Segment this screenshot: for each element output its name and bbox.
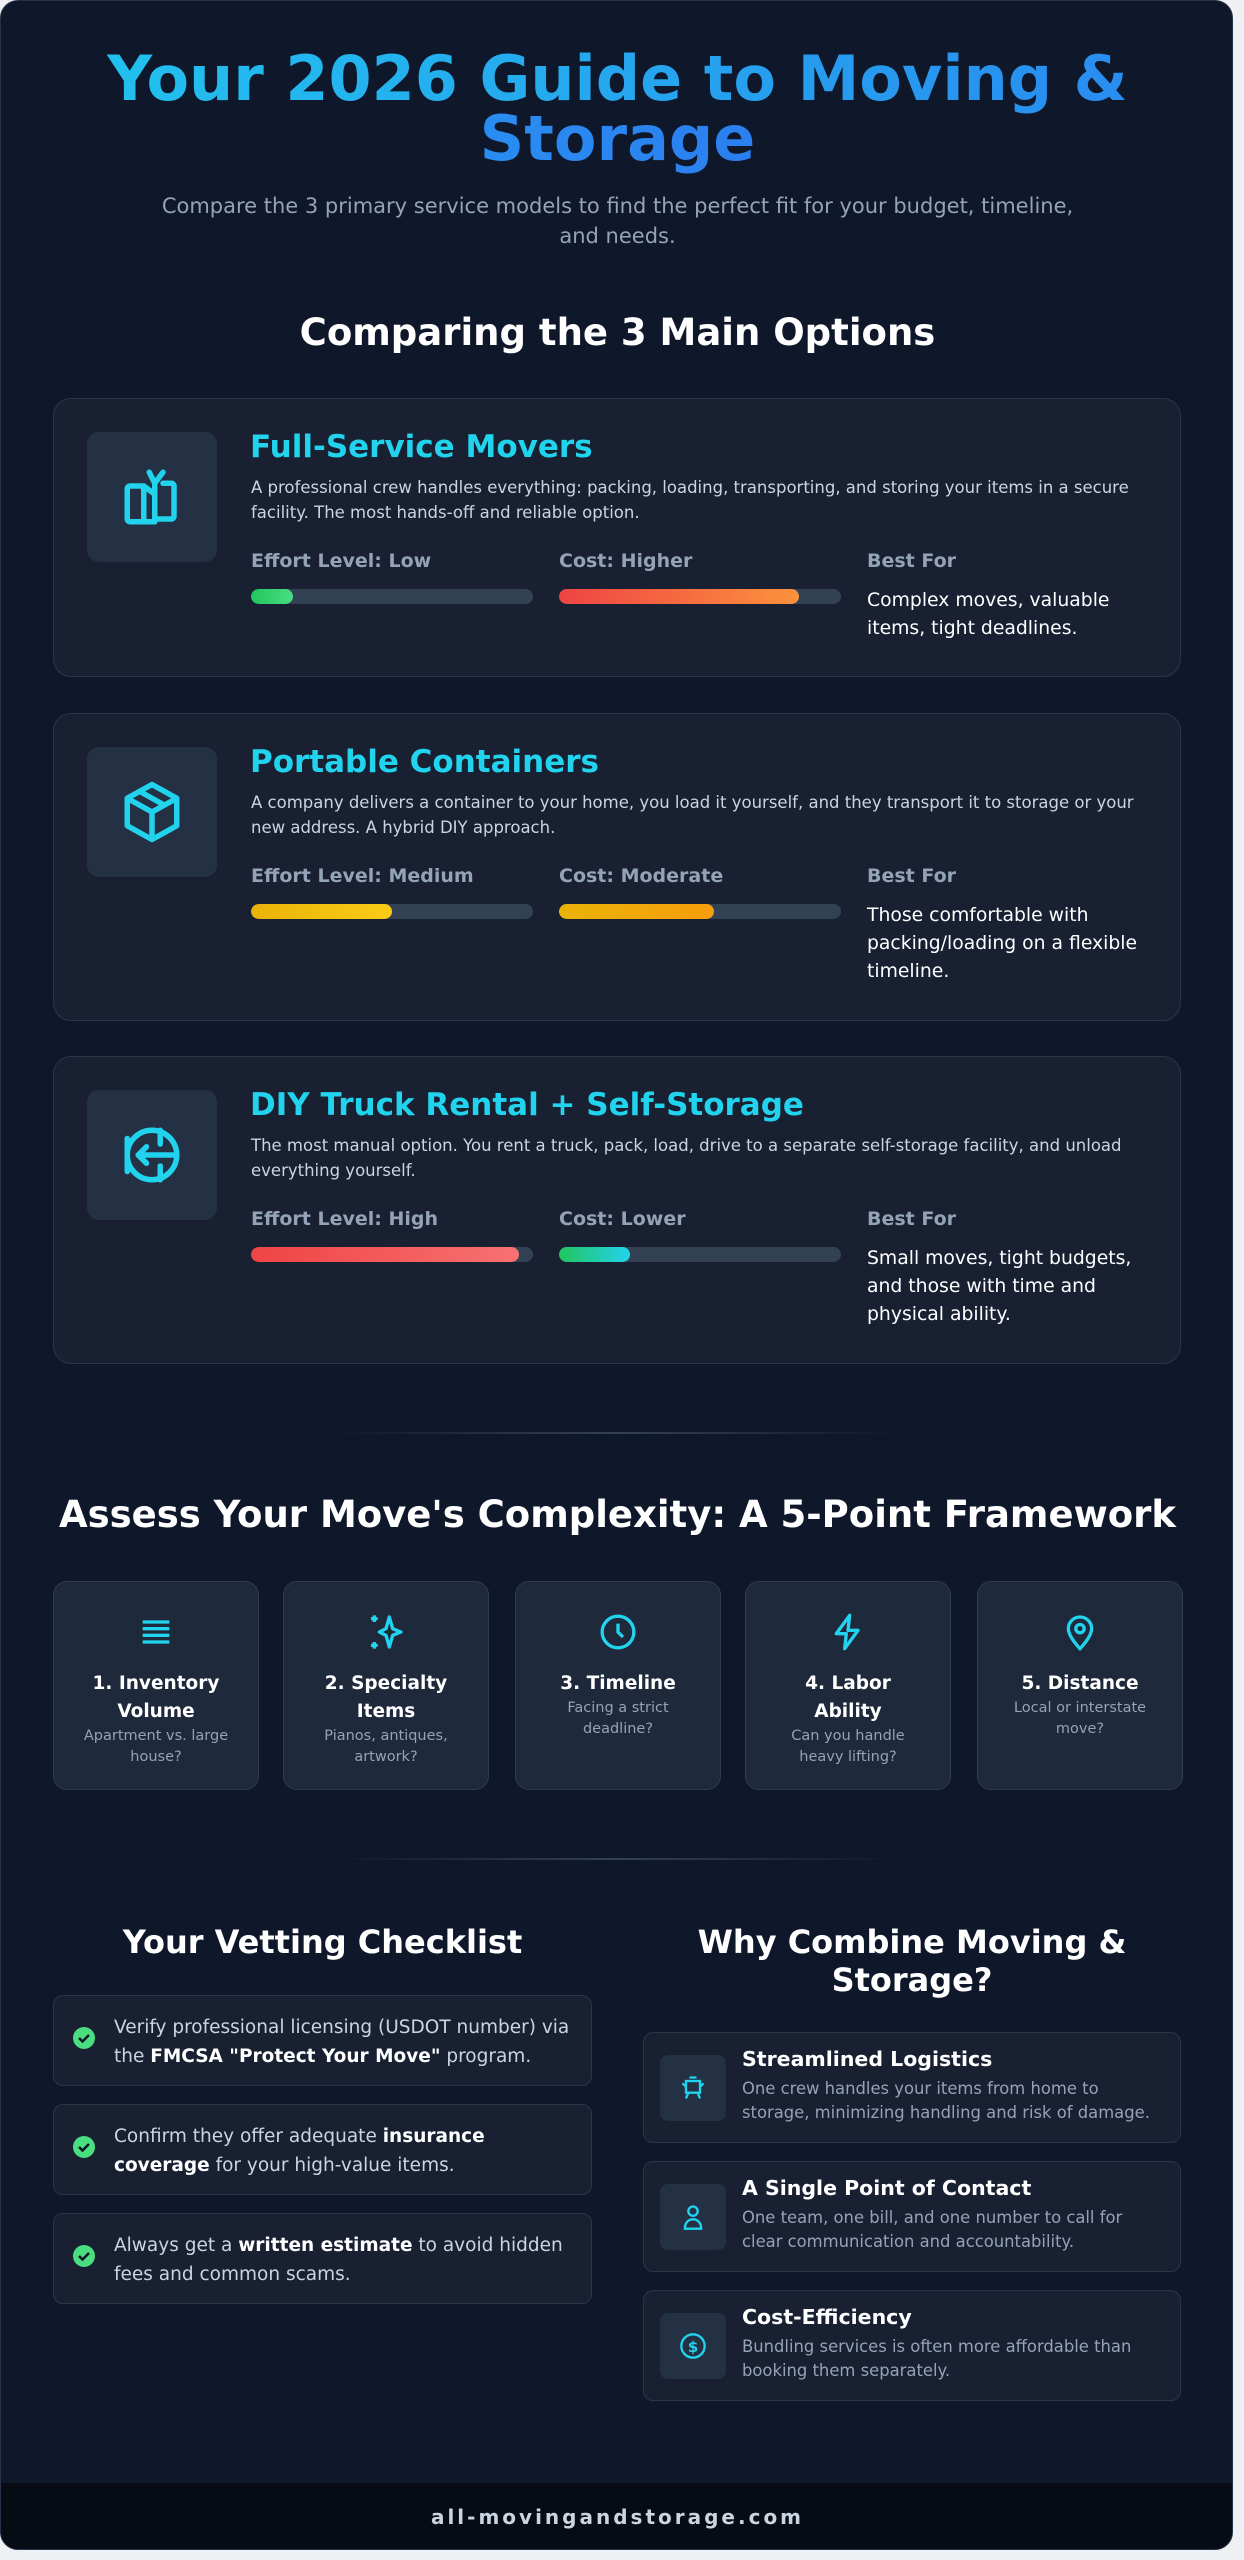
framework card 3: deadline? [583,1721,653,1737]
framework card 1: 1. Inventory [93,1673,219,1694]
footer: all-movingandstorage.com [431,2505,804,2529]
benefit 3: Cost-Efficiency [742,2305,912,2329]
panel: diy truck rental [53,1056,1181,1364]
effort meter: Effort Level: High [251,1208,438,1230]
description: A company delivers a container to your home, you load it yourself, and they transport it to storage or your new address. A hybrid DIY approach. [251,793,1134,837]
framework card 4: Ability [814,1701,882,1722]
checklist item 2: Confirm they offer adequate insurance coverage for your high-value items. [114,2126,485,2176]
heading: why combine: Storage? [832,1961,992,1999]
framework card 4 [745,1581,951,1790]
best for: Best For [867,1208,956,1230]
subtitle: Compare the 3 primary service models to find the perfect fit for your budget, timeline, and needs. [162,194,1073,248]
panel: full-service movers: Complex moves, valuable items, tight deadlines. [867,590,1109,639]
heading: framework: Assess Your Move's Complexity: A 5-Point Framework [59,1493,1176,1536]
title: Storage [480,102,755,175]
effort meter: Effort Level: Low [251,550,431,572]
framework card 4: Can you handle [791,1728,905,1744]
icon: box [87,747,217,877]
description: The most manual option. You rent a truck, pack, load, drive to a separate self-storage facility, and unload everything yourself. [251,1136,1122,1180]
benefit 1 [643,2032,1181,2143]
framework card 4: 4. Labor [805,1673,891,1694]
heading: DIY Truck Rental + Self-Storage [250,1087,804,1123]
benefit 1: Streamlined Logistics [742,2047,992,2071]
benefit 2 [643,2161,1181,2272]
icon: circle arrow [87,1090,217,1220]
effort meter: Effort Level: Medium [251,865,474,887]
framework card 3: Facing a strict [567,1700,669,1716]
framework card 2: Pianos, antiques, [324,1728,448,1744]
panel: portable containers: Those comfortable with packing/loading on a flexible timeline. [867,905,1137,982]
icon: boxes [87,432,217,562]
heading: comparing: Comparing the 3 Main Options [300,311,935,354]
description: A professional crew handles everything: packing, loading, transporting, and storing your items in a secure facility. The most hands-off and reliable option. [251,478,1129,522]
benefit 3: Bundling services is often more affordable than booking them separately. [742,2337,1131,2380]
framework card 5: Local or interstate [1014,1700,1146,1716]
heading: why combine [698,1923,1126,1999]
cost meter: Cost: Lower [559,1208,686,1230]
framework card 5 [977,1581,1183,1790]
best for: Best For [867,550,956,572]
framework card 2: 2. Specialty [325,1673,447,1694]
title: Your 2026 Guide to Moving & [107,42,1128,115]
benefit 1: One crew handles your items from home to storage, minimizing handling and risk of damage. [742,2079,1150,2122]
title [107,42,1128,175]
framework card 2 [283,1581,489,1790]
cost meter: Cost: Higher [559,550,692,572]
footer [1,2483,1234,2551]
panel: full-service movers [53,398,1181,677]
checklist item 3: Always get a written estimate to avoid hidden fees and common scams. [114,2235,563,2285]
framework card 3: 3. Timeline [560,1673,676,1694]
checklist item 2 [53,2104,592,2195]
framework card 3 [515,1581,721,1790]
benefit 2: A Single Point of Contact [742,2176,1031,2200]
checklist item 3 [53,2213,592,2304]
heading: Portable Containers [250,744,599,780]
framework card 2: artwork? [354,1749,418,1765]
framework card 1: Apartment vs. large [84,1728,228,1744]
framework card 2: Items [357,1701,415,1722]
framework card 1: house? [130,1749,182,1765]
checklist item 1 [53,1995,592,2086]
heading: checklist: Your Vetting Checklist [123,1923,522,1961]
benefit 3: $ [688,2338,698,2356]
panel: diy truck rental: Small moves, tight budgets, and those with time and physical ability. [867,1248,1131,1325]
framework card 4: heavy lifting? [799,1749,897,1765]
framework card 5: move? [1056,1721,1104,1737]
framework card 1 [53,1581,259,1790]
cost meter: Cost: Moderate [559,865,723,887]
panel: portable containers [53,713,1181,1021]
heading: why combine: Why Combine Moving & [698,1923,1126,1961]
heading: Full-Service Movers [250,429,593,465]
checklist item 1: Verify professional licensing (USDOT number) via the FMCSA "Protect Your Move" program. [114,2017,569,2067]
framework card 5: 5. Distance [1021,1673,1139,1694]
best for: Best For [867,865,956,887]
benefit 3 [643,2290,1181,2401]
framework card 1: Volume [117,1701,195,1722]
benefit 2: One team, one bill, and one number to call for clear communication and accountability. [742,2208,1122,2251]
